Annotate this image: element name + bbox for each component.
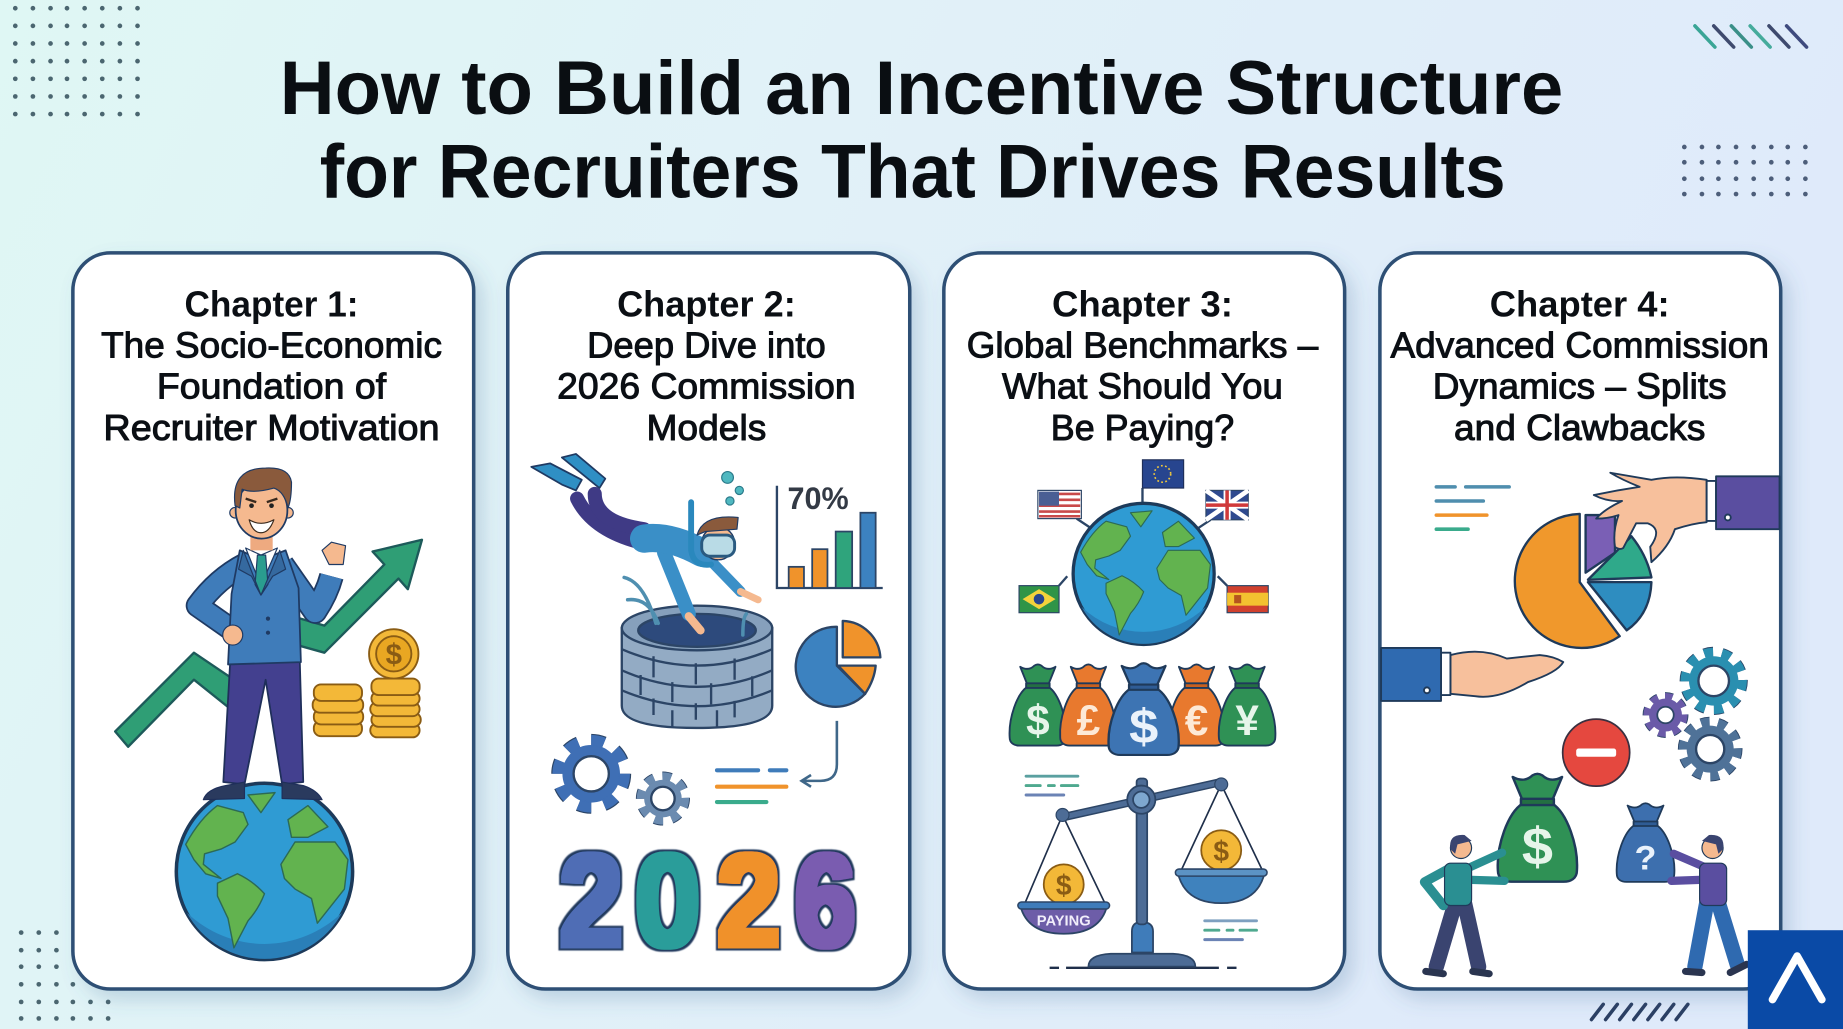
flag: EU [1142, 460, 1184, 488]
decorative dots: top right [1682, 145, 1808, 196]
title: How to Build an Incentive Structure [280, 46, 1563, 131]
icon: globe with flags [1073, 503, 1214, 644]
heading: chapter 3: Global Benchmarks – [967, 324, 1319, 366]
icon: rising green arrow [115, 540, 422, 747]
heading: chapter 3 [967, 283, 1319, 448]
icon: coin on right pan [1201, 830, 1241, 870]
flag: USA [1038, 490, 1081, 519]
flag: Brazil [1019, 586, 1059, 613]
heading: chapter 1: The Socio-Economic [101, 324, 442, 366]
heading: chapter 4: and Clawbacks [1454, 407, 1705, 448]
icon: bubbles [722, 472, 743, 505]
flag: UK [1206, 490, 1248, 520]
icon: minus sign [1563, 719, 1630, 786]
heading: chapter 3: Chapter 3: [1052, 283, 1233, 324]
icon: large gear [558, 741, 624, 807]
heading: chapter 4: Dynamics – Splits [1433, 366, 1727, 407]
icon: coin stacks [313, 629, 421, 737]
panel: chapter 1 [73, 253, 474, 989]
heading: chapter 1: Chapter 1: [185, 283, 358, 324]
heading: chapter 2 [557, 283, 856, 448]
decorative slashes: top right [1695, 26, 1807, 47]
title: for Recruiters That Drives Results [320, 130, 1506, 215]
illustration: brick well [622, 606, 772, 728]
text lines icon [717, 770, 786, 802]
icon: top hand and sleeve [1594, 473, 1780, 562]
big number 2026: 6 [795, 827, 856, 974]
heading: chapter 3: Be Paying? [1051, 407, 1234, 448]
icon: bottom hand and sleeve [1381, 648, 1563, 701]
flag: Spain [1227, 586, 1268, 613]
icon: coin on right pan: $ [1213, 835, 1229, 867]
logo [1748, 930, 1843, 1029]
icon: globe [176, 783, 353, 960]
illustration: diver [531, 454, 758, 635]
pie chart [796, 621, 880, 707]
big number 2026 [559, 827, 856, 974]
heading: chapter 1 [101, 283, 442, 448]
label: paying: PAYING [1037, 914, 1091, 930]
bar chart [777, 480, 883, 588]
text lines icon [1026, 776, 1256, 940]
flag connectors [1059, 488, 1227, 586]
heading: chapter 2: Deep Dive into [587, 324, 826, 366]
title [280, 46, 1563, 215]
icon: coin stacks: $ [386, 638, 402, 671]
icon: coin on left pan [1044, 864, 1084, 904]
icon: small gear [641, 776, 685, 821]
icon: currency money bags: $ [1026, 697, 1050, 744]
heading: chapter 4: Advanced Commission [1390, 324, 1769, 366]
illustration: businessman [197, 468, 346, 800]
heading: chapter 1: Foundation of [157, 366, 387, 407]
heading: chapter 4 [1390, 283, 1769, 448]
icon: blue question bag [1617, 803, 1674, 882]
illustration: balance scale [1018, 778, 1267, 968]
text lines icon [1436, 487, 1509, 529]
illustration: left person holding bag [1425, 835, 1504, 974]
heading: chapter 1: Recruiter Motivation [103, 407, 440, 448]
big number 2026: 2 [717, 827, 780, 974]
pie chart being split [1515, 514, 1651, 648]
arrow [802, 721, 837, 787]
panel: chapter 4 [1380, 253, 1781, 989]
heading: chapter 2: Chapter 2: [617, 283, 796, 324]
icon: currency money bags: € [1185, 697, 1208, 744]
icon: currency money bags: £ [1077, 697, 1101, 744]
icon: coin on left pan: $ [1056, 869, 1072, 901]
bar chart: 70% [788, 480, 849, 516]
icon: currency money bags: ¥ [1235, 697, 1259, 744]
icon: slate gear [1683, 722, 1737, 776]
heading: chapter 3: What Should You [1002, 366, 1283, 407]
panel: chapter 3 [944, 253, 1345, 989]
icon: purple gear [1647, 696, 1684, 734]
heading: chapter 4: Chapter 4: [1490, 283, 1670, 324]
icon: green money bag [1498, 774, 1577, 882]
panel: chapter 2 [508, 253, 910, 989]
illustration: right person holding bag [1671, 835, 1747, 973]
icon: green money bag: $ [1522, 817, 1553, 876]
decorative dots: bottom left [19, 930, 110, 1021]
big number 2026: 2 [559, 827, 623, 974]
heading: chapter 2: 2026 Commission [557, 366, 856, 407]
icon: blue question bag: ? [1635, 839, 1657, 877]
decorative dots: top left [13, 6, 140, 116]
icon: currency money bags [1010, 663, 1275, 755]
icon: currency money bags: $ [1129, 700, 1158, 753]
big number 2026: 0 [635, 827, 701, 974]
icon: teal gear [1685, 653, 1742, 709]
decorative slashes: bottom right [1591, 1004, 1688, 1020]
heading: chapter 2: Models [646, 407, 766, 448]
